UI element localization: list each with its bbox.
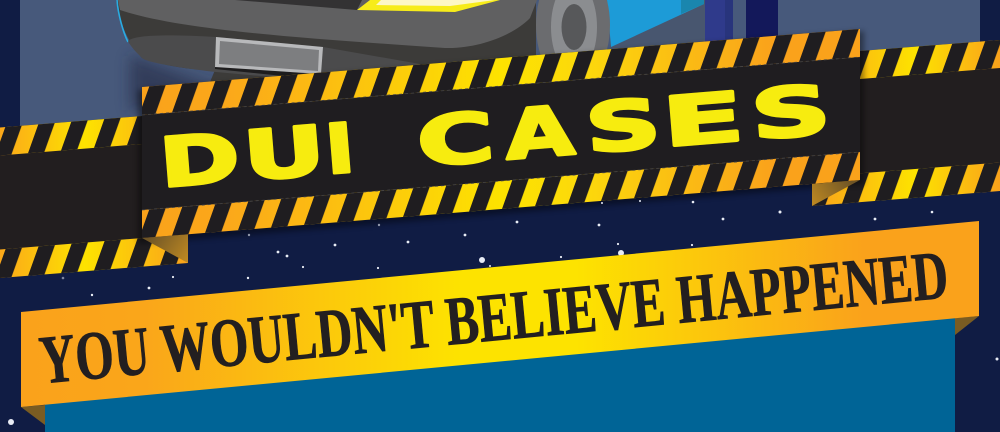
main tape bottom stripes — [142, 152, 860, 238]
title: DUI CASES: U — [240, 111, 328, 197]
back caution tape: right — [812, 40, 1000, 206]
title: DUI CASES: C — [414, 97, 497, 182]
windscreen edge — [235, 0, 362, 10]
stars — [8, 200, 998, 425]
main tape top stripes — [142, 29, 860, 115]
main caution tape — [142, 29, 860, 238]
building backdrop — [20, 0, 980, 135]
left tape upper stripes — [0, 116, 142, 156]
main tape shadow — [138, 31, 864, 244]
ribbon folds — [21, 316, 979, 425]
wheel — [536, 0, 610, 87]
title: DUI CASES: S — [583, 83, 664, 169]
back caution tape: left — [0, 116, 188, 278]
right tape upper stripes — [860, 40, 1000, 79]
shadow beneath the car — [130, 55, 300, 110]
right tape lower stripes — [812, 162, 1000, 206]
blue body edge — [117, 0, 128, 42]
title: DUI CASES — [156, 70, 834, 204]
headlight — [357, 0, 500, 12]
title: DUI CASES: A — [502, 90, 577, 175]
tape folds — [142, 180, 860, 263]
car body side in blue — [607, 0, 704, 47]
police car — [116, 0, 704, 90]
car bumper — [116, 0, 536, 82]
license plate — [215, 37, 323, 80]
bumper grey band — [118, 0, 537, 48]
title: DUI CASES: S — [748, 70, 834, 156]
blue content panel — [45, 310, 955, 432]
lower bumper panel — [128, 35, 420, 90]
title: DUI CASES: I — [322, 110, 357, 190]
left tape lower stripes — [0, 234, 188, 278]
title: DUI CASES: E — [659, 77, 747, 162]
title: DUI CASES: D — [156, 117, 243, 203]
